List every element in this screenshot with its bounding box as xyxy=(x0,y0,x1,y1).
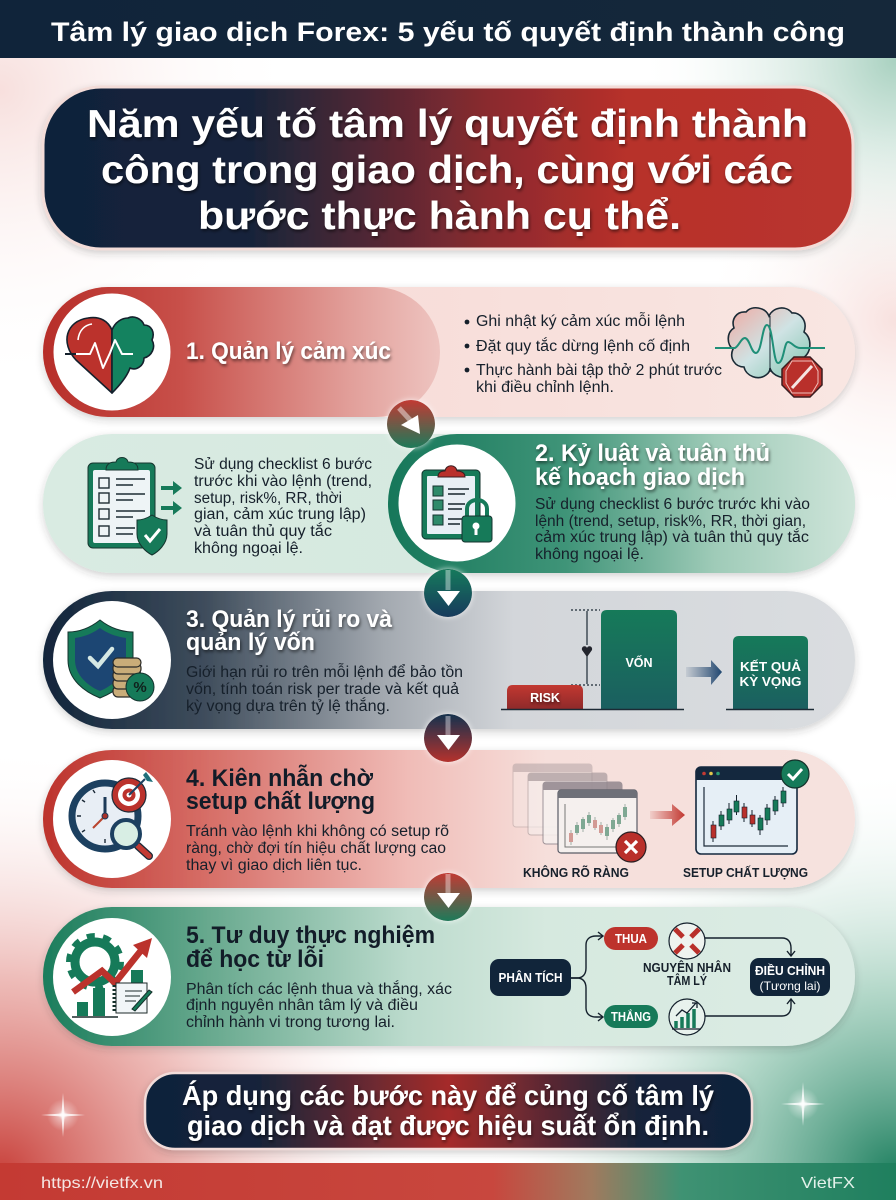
panel 5 body: Phân tích các lệnh thua và thắng, xác xyxy=(186,981,452,998)
closing text xyxy=(182,1080,714,1141)
capital bar xyxy=(601,610,677,709)
panel 2 left text: gian, cảm xúc trung lập) xyxy=(194,506,366,523)
box: adjust xyxy=(750,958,830,996)
panel 1 bullets: khi điều chỉnh lệnh. xyxy=(476,379,614,396)
pill: loss: THUA xyxy=(615,932,647,946)
panel 2 title xyxy=(535,440,770,491)
panel 5: experimental mindset xyxy=(43,907,855,1046)
panel 3 title xyxy=(186,606,393,656)
box: analysis xyxy=(490,959,571,996)
label: psychological cause: NGUYÊN NHÂN xyxy=(643,960,731,975)
panel 2 left text: và tuân thủ quy tắc xyxy=(194,523,332,540)
panel 4 body xyxy=(186,823,449,874)
diagram: analysis flow xyxy=(490,923,830,1035)
panel 3 body: vốn, tính toán risk per trade và kết quả xyxy=(186,681,459,698)
panel 5 body xyxy=(186,981,452,1031)
icon: clipboard with shield xyxy=(88,458,182,555)
panel 2 title: 2. Kỷ luật và tuân thủ xyxy=(535,440,770,467)
panel 1 bullets: Ghi nhật ký cảm xúc mỗi lệnh xyxy=(476,313,685,330)
box: adjust: ĐIỀU CHỈNH xyxy=(755,963,825,978)
capital bar: VỐN xyxy=(625,655,653,670)
icon: broken cross xyxy=(669,923,705,959)
panel 3 body: Giới hạn rủi ro trên mỗi lệnh để bảo tồn xyxy=(186,664,463,681)
panel 1 bullets: Thực hành bài tập thở 2 phút trước xyxy=(476,362,722,379)
panel 2 left text: không ngoại lệ. xyxy=(194,540,303,557)
closing text: Áp dụng các bước này để củng cố tâm lý xyxy=(182,1080,714,1111)
diagram: unclear chart stack xyxy=(513,764,646,862)
panel 2: discipline xyxy=(43,434,855,573)
risk bar: RISK xyxy=(530,691,560,705)
panel 5 body: chỉnh hành vi trong tương lai. xyxy=(186,1014,395,1031)
expected result bar: KẾT QUẢ xyxy=(740,659,801,674)
icon: heart and brain xyxy=(65,317,154,393)
panel 2 title: kế hoạch giao dịch xyxy=(535,464,745,491)
hero heading: công trong giao dịch, cùng với các xyxy=(101,149,793,192)
arrow: step 2 to 3 xyxy=(424,569,472,617)
panel 2 body: cảm xúc trung lập) và tuân thủ quy tắc xyxy=(535,529,809,546)
closing text: giao dịch và đạt được hiệu suất ổn định. xyxy=(187,1110,709,1141)
icon: clock, target and magnifier xyxy=(72,772,153,856)
panel 2 left text: Sử dụng checklist 6 bước xyxy=(194,456,372,473)
icon: gear, growth arrow, notebook xyxy=(69,936,152,1017)
panel 1 bullets xyxy=(465,313,722,396)
icon: shield with coins: % xyxy=(133,679,147,696)
arrow: step 4 to 5 xyxy=(424,873,472,921)
pill: loss xyxy=(604,927,658,950)
label: psychological cause: TÂM LÝ xyxy=(667,973,708,988)
footer brand: VietFX xyxy=(801,1175,855,1192)
arrow: step 1 to 2 xyxy=(387,400,435,448)
expected result bar: KỲ VỌNG xyxy=(740,674,802,689)
panel 3 body xyxy=(186,664,463,715)
footer url: https://vietfx.vn xyxy=(41,1175,163,1192)
label: psychological cause xyxy=(643,960,731,988)
panel 4 title: 4. Kiên nhẫn chờ xyxy=(186,764,374,792)
panel 5 title: để học từ lỗi xyxy=(186,945,324,973)
panel 1: emotion management xyxy=(43,287,855,417)
panel 2 left text: setup, risk%, RR, thời xyxy=(194,490,342,507)
icon: brain with pulse and stop sign xyxy=(715,308,825,397)
panel 5 title xyxy=(186,922,435,973)
label: SETUP CHẤT LƯỢNG xyxy=(683,865,808,880)
box: adjust: (Tương lai) xyxy=(760,979,820,993)
pill: win xyxy=(604,1005,658,1028)
diagram: quality setup chart xyxy=(696,760,809,854)
pill: win: THẮNG xyxy=(611,1009,651,1024)
panel 3 body: kỳ vọng dựa trên tỷ lệ thắng. xyxy=(186,698,390,715)
panel 2 left text xyxy=(194,456,372,557)
hero heading: bước thực hành cụ thể. xyxy=(198,195,681,238)
panel 2 body: Sử dụng checklist 6 bước trước khi vào xyxy=(535,496,810,513)
panel 4 title xyxy=(186,764,375,815)
panel 4: patience xyxy=(43,750,855,888)
hero heading: Năm yếu tố tâm lý quyết định thành xyxy=(87,103,808,146)
icon: checklist with padlock xyxy=(422,466,492,542)
panel 2 body: không ngoại lệ. xyxy=(535,546,644,563)
icon: shield with coins xyxy=(68,620,154,701)
panel 5 title: 5. Tư duy thực nghiệm xyxy=(186,922,435,949)
risk bar xyxy=(507,685,583,709)
arrow: step 3 to 4 xyxy=(424,714,472,762)
box: analysis: PHÂN TÍCH xyxy=(498,970,562,985)
panel 2 left text: trước khi vào lệnh (trend, xyxy=(194,473,372,490)
panel 1 title: 1. Quản lý cảm xúc xyxy=(186,338,391,365)
panel 4 body: thay vì giao dịch liên tục. xyxy=(186,857,362,874)
arrow xyxy=(686,660,722,685)
header bar xyxy=(0,0,896,58)
footer xyxy=(0,1163,896,1200)
closing banner xyxy=(145,1073,752,1149)
expected result bar xyxy=(733,636,808,709)
panel 4 title: setup chất lượng xyxy=(186,788,375,815)
hero heading xyxy=(87,103,808,238)
panel 3: risk and capital xyxy=(43,591,855,729)
hero banner xyxy=(43,87,853,249)
page title: Tâm lý giao dịch Forex: 5 yếu tố quyết định thành công xyxy=(51,17,845,47)
panel 4 body: ràng, chờ đợi tín hiệu chất lượng cao xyxy=(186,840,446,857)
panel 4 body: Tránh vào lệnh khi không có setup rõ xyxy=(186,823,449,840)
panel 2 body xyxy=(535,496,810,563)
panel 1 bullets: Đặt quy tắc dừng lệnh cố định xyxy=(476,338,690,355)
arrow xyxy=(650,804,685,826)
panel 3 title: 3. Quản lý rủi ro và xyxy=(186,606,393,633)
panel 3 title: quản lý vốn xyxy=(186,629,315,656)
panel 5 body: định nguyên nhân tâm lý và điều xyxy=(186,997,418,1014)
diagram: risk vs capital xyxy=(501,610,814,710)
panel 2 body: lệnh (trend, setup, risk%, RR, thời gian, xyxy=(535,513,806,530)
label: KHÔNG RÕ RÀNG xyxy=(523,865,629,880)
icon: growth chart xyxy=(669,999,705,1035)
